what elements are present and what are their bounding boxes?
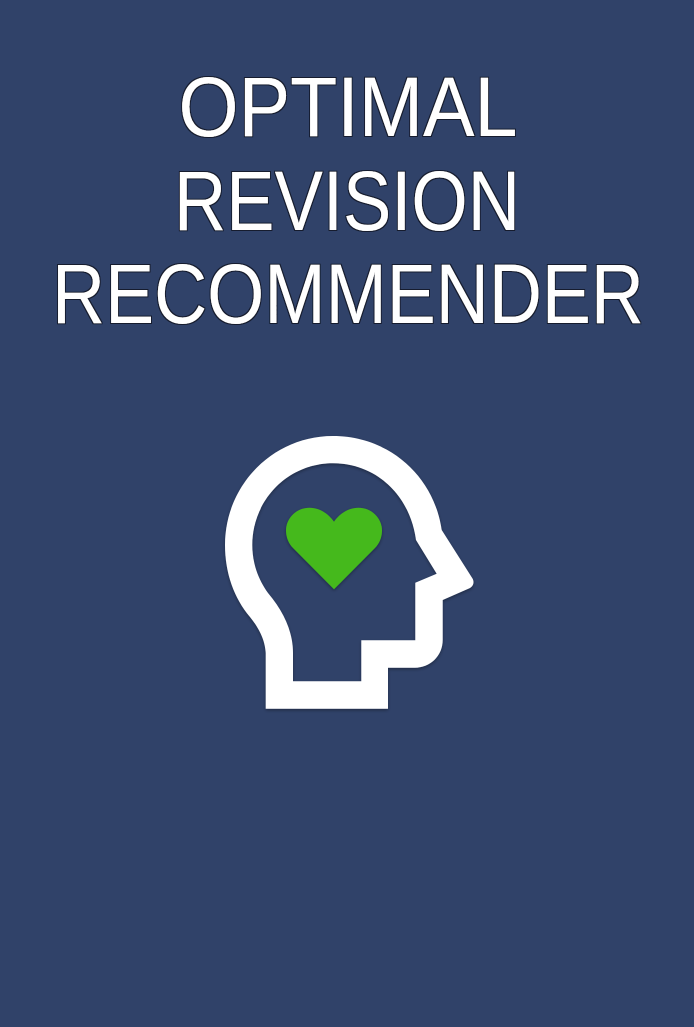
title	[52, 60, 644, 341]
title: REVISION	[174, 154, 520, 248]
icon: head outline	[225, 436, 474, 709]
title: OPTIMAL	[178, 60, 518, 154]
icon: heart	[286, 508, 382, 589]
icon: head with heart	[225, 436, 474, 709]
